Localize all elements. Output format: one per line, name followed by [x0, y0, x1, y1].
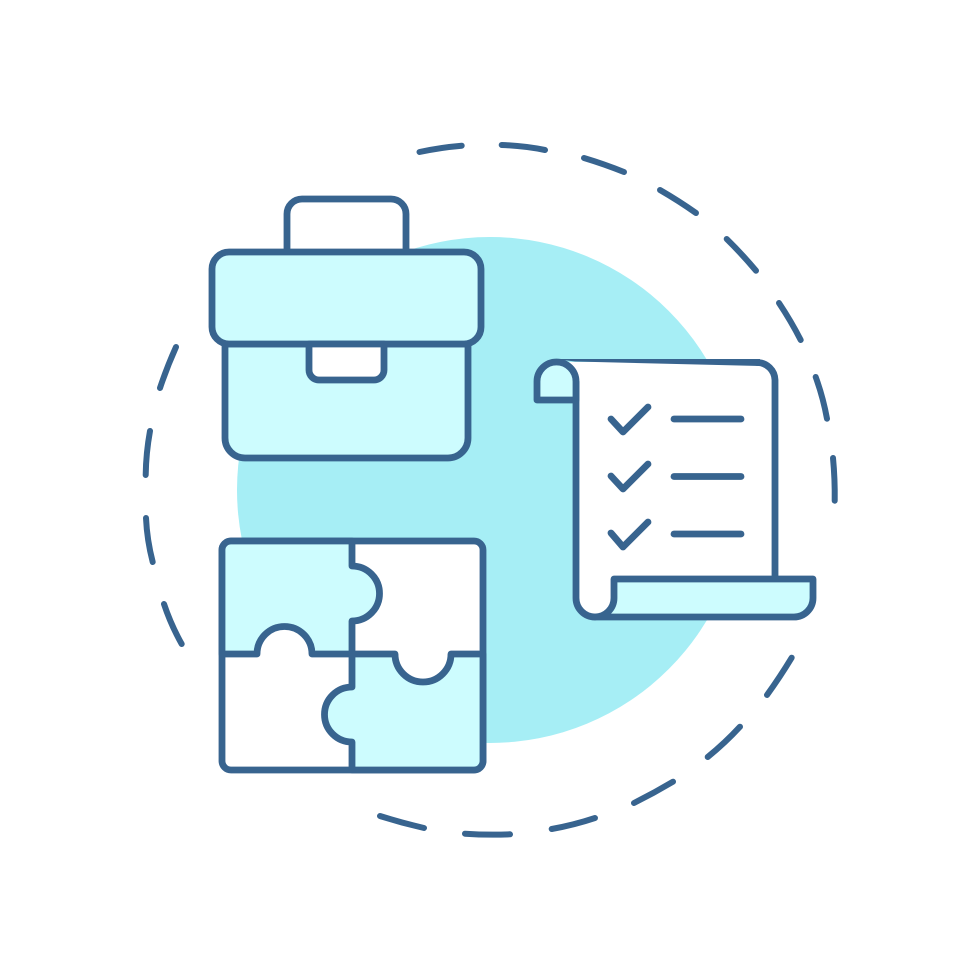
scroll bottom roll — [595, 579, 813, 617]
dashed ring — [146, 145, 835, 835]
scroll page — [556, 362, 775, 617]
checklist row 3 — [611, 522, 741, 547]
puzzle piece bottom right — [324, 654, 483, 770]
briefcase handle — [287, 199, 406, 252]
scroll page outline — [576, 362, 775, 617]
puzzle frame — [222, 541, 483, 770]
scroll top edge — [555, 359, 760, 366]
icon: briefcase — [212, 199, 481, 458]
briefcase clasp — [309, 344, 384, 380]
scroll top curl — [537, 362, 576, 400]
checklist row 2 — [611, 464, 741, 489]
icon: puzzle — [222, 541, 483, 770]
briefcase body — [225, 344, 468, 458]
icon: checklist scroll — [537, 359, 813, 617]
background circle — [237, 237, 743, 743]
puzzle piece top left — [222, 541, 379, 654]
checklist row 1 — [611, 407, 741, 432]
briefcase lid — [212, 252, 481, 344]
